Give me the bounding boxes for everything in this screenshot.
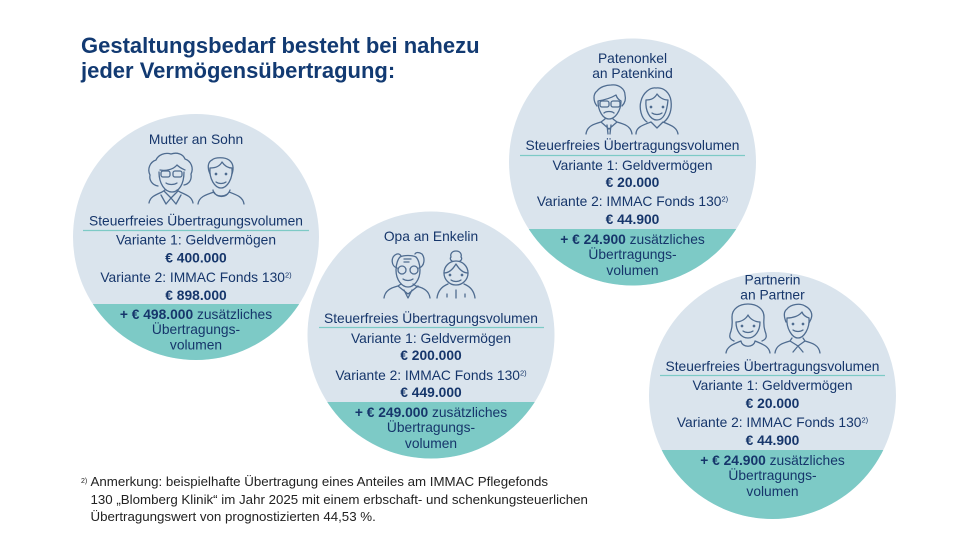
heading: Mutter an Sohn: Mutter an Sohn: [149, 132, 243, 147]
label: Steuerfreies: Steuerfreies Übertragungsvolumen: [666, 357, 879, 374]
panel: Patenonkel an Patenkind: [506, 38, 760, 289]
footnote: 2): [81, 478, 87, 485]
value: 20.000: € 20.000: [746, 396, 800, 411]
label: Variante 1: Variante 1: Geldvermögen: [116, 232, 276, 248]
heading: Opa an Enkelin: Opa an Enkelin: [384, 229, 478, 244]
panel: Mutter an Sohn: [70, 114, 322, 364]
panel: Opa an Enkelin: [305, 212, 557, 462]
callout: additional volume: Übertragungs-: [152, 320, 240, 337]
icon: mother and son: [149, 153, 244, 204]
callout: additional volume: volumen: [606, 263, 659, 278]
label: Steuerfreies: Steuerfreies Übertragungsvolumen: [324, 309, 538, 326]
label: Variante 2: 2): [520, 368, 527, 378]
callout: additional volume: + € 498.000 zusätzliches: [120, 307, 272, 322]
footnote: Anmerkung: beispielhafte Übertragung eines Anteiles am IMMAC Pflegefonds: [90, 474, 548, 489]
value: 44.900: € 44.900: [746, 433, 800, 448]
heading: Partnerin an Partner: an Partner: [740, 288, 805, 302]
value: 20.000: € 20.000: [606, 175, 660, 190]
callout: additional volume: Übertragungs-: [588, 245, 677, 262]
title: jeder Vermögensübertragung:: [80, 58, 395, 83]
value: 898.000: € 898.000: [165, 288, 227, 303]
label: Variante 1: Variante 1: Geldvermögen: [552, 158, 713, 173]
value: 400.000: € 400.000: [165, 250, 227, 266]
heading: Partnerin an Partner: Partnerin: [745, 272, 800, 288]
heading: Patenonkel an Patenkind: an Patenkind: [592, 66, 673, 81]
label: Steuerfreies: Steuerfreies Übertragungsvolumen: [526, 136, 739, 153]
icon: woman and man: [726, 304, 820, 353]
label: Variante 2: Variante 2: IMMAC Fonds 130: [335, 368, 520, 383]
value: 44.900: € 44.900: [606, 212, 660, 227]
value: 200.000: € 200.000: [400, 348, 462, 363]
callout: additional volume: volumen: [746, 484, 799, 499]
label: Variante 1: Variante 1: Geldvermögen: [692, 378, 853, 393]
label: Variante 2: Variante 2: IMMAC Fonds 130: [100, 270, 285, 285]
icon: grandfather and granddaughter: [384, 251, 475, 298]
label: Variante 1: Variante 1: Geldvermögen: [351, 331, 511, 346]
callout: additional volume: volumen: [170, 338, 222, 352]
callout: additional volume: volumen: [405, 436, 457, 451]
label: Variante 2: 2): [861, 416, 869, 424]
label: Variante 2: Variante 2: IMMAC Fonds 130: [677, 415, 861, 430]
callout: additional volume: Übertragungs-: [728, 466, 817, 483]
heading: Patenonkel an Patenkind: Patenonkel: [598, 51, 667, 66]
callout: additional volume: + € 249.000 zusätzliches: [355, 405, 507, 420]
label: Variante 2: 2): [721, 194, 729, 204]
title: Gestaltungsbedarf besteht bei nahezu: [81, 33, 480, 58]
callout: additional volume: + € 24.900 zusätzliches: [560, 232, 705, 247]
value: 449.000: € 449.000: [400, 385, 462, 400]
callout: additional volume: + € 24.900 zusätzliches: [700, 453, 845, 468]
callout: additional volume: Übertragungs-: [387, 418, 475, 435]
label: Steuerfreies: Steuerfreies Übertragungsvolumen: [89, 212, 303, 228]
label: Variante 2: Variante 2: IMMAC Fonds 130: [537, 194, 721, 209]
footnote: Übertragungswert von prognostizierten 44,53 %.: [90, 509, 376, 524]
footnote: 130 „Blomberg Klinik“ im Jahr 2025 mit einem erbschaft- und schenkungsteuerlichen: [90, 492, 588, 507]
icon: godfather and godchild: [586, 85, 678, 134]
label: Variante 2: 2): [285, 270, 292, 280]
panel: Partnerin an Partner: [646, 272, 900, 522]
